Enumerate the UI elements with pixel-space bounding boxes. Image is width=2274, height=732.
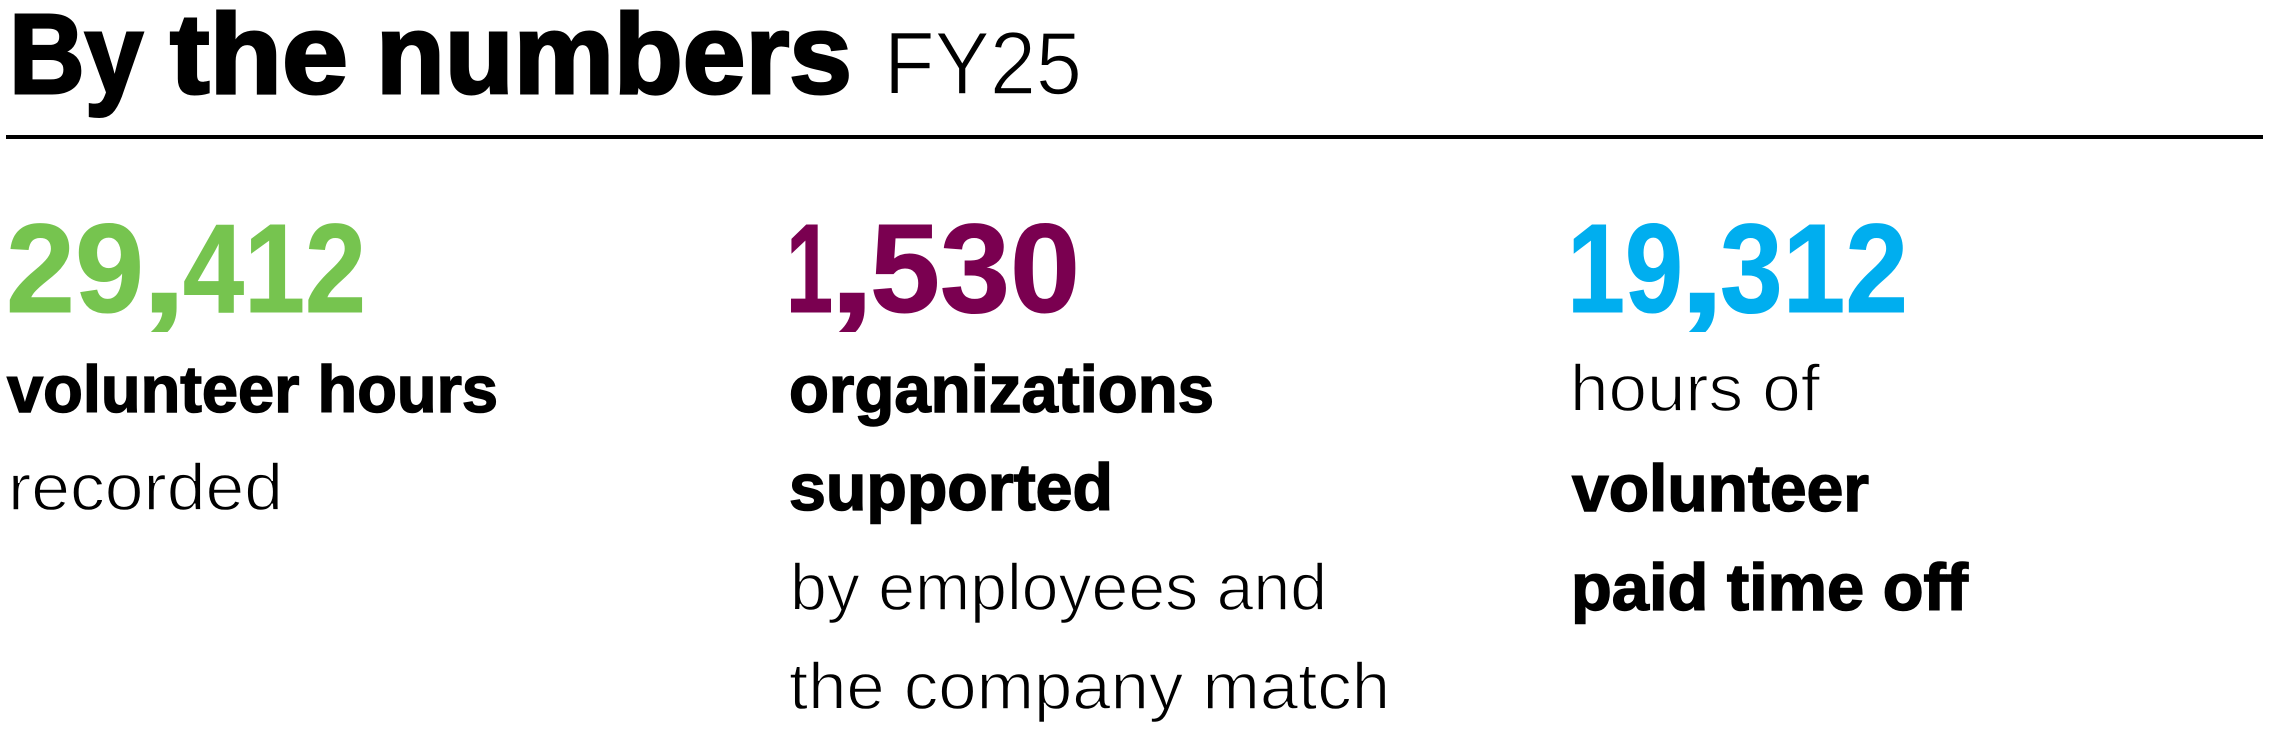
stat number: 19,312: , [1679,198,1725,339]
stat number: 1,530: , [829,198,875,339]
stat number: 1,530: 1 [786,198,833,339]
label: volunteer hours recorded [7,352,498,524]
stat number: 29,412: 29 [6,198,144,339]
label: volunteer hours recorded: recorded [8,450,283,524]
label: organizations supported by employees and the company match: organizations [789,352,1214,426]
stat number: 1,530: 530 [870,198,1080,339]
stat number: 19,312: 19 [1567,198,1683,339]
header [9,0,1082,117]
label: hours of volunteer paid time off: volunteer [1572,451,1869,525]
title [9,0,852,117]
fiscal year label: FY25 [884,13,1082,113]
panel: volunteer hours [6,198,498,524]
panel: volunteer paid time off [1567,198,1969,624]
label: hours of volunteer paid time off: hours of [1570,351,1821,425]
label: organizations supported by employees and the company match: supported [789,450,1113,524]
label: organizations supported by employees and the company match: by employees and [790,550,1327,624]
stat number: 29,412 [6,198,366,339]
stat number: 19,312: 312 [1720,198,1908,339]
label: hours of volunteer paid time off [1570,351,1969,624]
label: volunteer hours recorded: volunteer hours [7,352,498,426]
stat number: 29,412: 412 [183,198,366,339]
stat number: 19,312 [1567,198,1908,339]
label: organizations supported by employees and the company match [789,352,1390,723]
label: organizations supported by employees and the company match: the company match [789,649,1390,723]
panel: organizations supported [786,198,1390,723]
label: hours of volunteer paid time off: paid time off [1571,550,1969,624]
stat number: 29,412: , [141,198,187,339]
